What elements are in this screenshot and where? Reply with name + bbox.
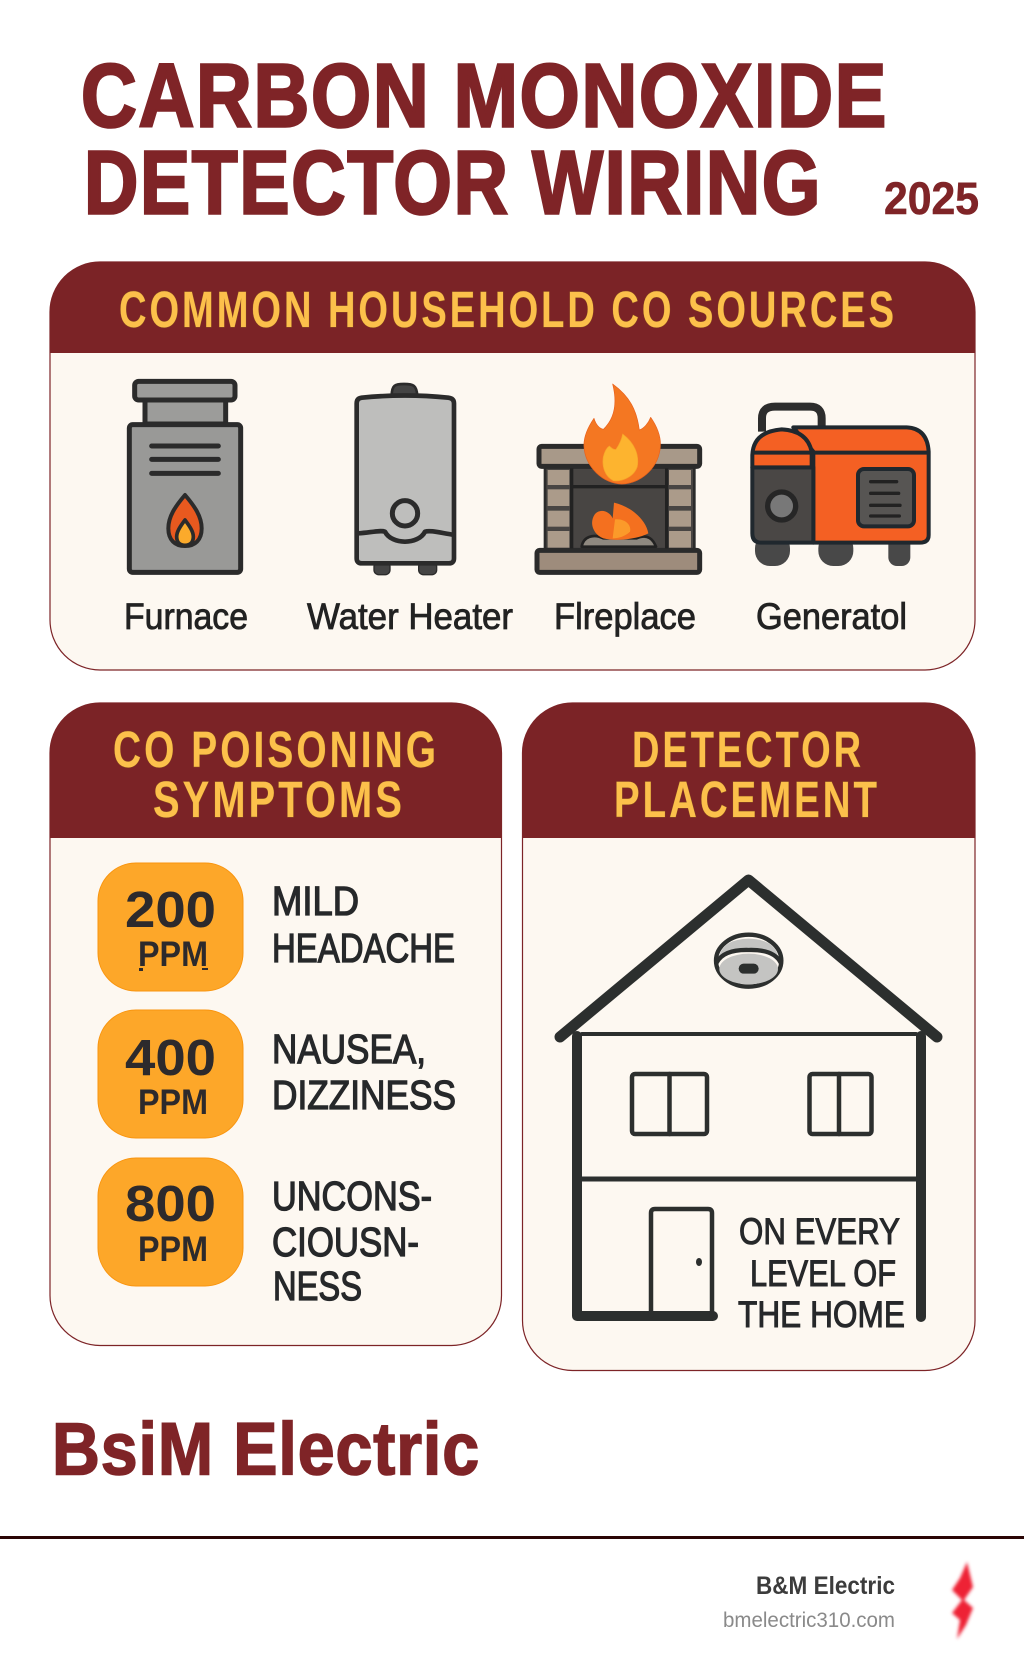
symptom: unconsciousness: CIOUSN- [272, 1219, 419, 1265]
icon: lightning bolt [952, 1562, 973, 1639]
footer text: bmelectric310.com [723, 1609, 895, 1632]
label: furnace: Furnace [124, 596, 248, 637]
footer text [723, 1572, 895, 1632]
heading: symptoms [113, 721, 439, 828]
icon: fireplace [537, 384, 700, 572]
label: fireplace: Flreplace [554, 596, 696, 637]
footer text: B&M Electric [756, 1572, 895, 1600]
icon: water heater [357, 384, 454, 575]
house diagram [560, 880, 937, 1317]
symptom: mild headache: MILD [272, 878, 359, 924]
window left [632, 1074, 707, 1134]
badge: 400 PPM: PPM [138, 1083, 208, 1122]
heading: placement [614, 721, 880, 828]
panel header: sources [50, 262, 975, 353]
heading: placement: DETECTOR [632, 721, 864, 778]
symptom: nausea, dizziness: DIZZINESS [272, 1072, 456, 1118]
house caption: LEVEL OF [750, 1253, 896, 1294]
heading: symptoms: SYMPTOMS [153, 771, 405, 828]
door [651, 1209, 712, 1316]
heading: placement: PLACEMENT [614, 771, 880, 828]
title: CARBON MONOXIDE [81, 46, 888, 146]
icon: smoke detector [716, 935, 781, 987]
year label: 2025 [884, 173, 979, 224]
title: DETECTOR WIRING [84, 134, 822, 234]
panel: common household CO sources [50, 262, 975, 670]
badge: 200 PPM [98, 863, 243, 991]
heading: symptoms: CO POISONING [113, 721, 439, 778]
panel header: placement [522, 703, 975, 838]
house caption: THE HOME [738, 1294, 905, 1335]
icon: generator [752, 407, 929, 566]
symptom: nausea, dizziness [272, 1026, 456, 1118]
symptom: mild headache: HEADACHE [272, 925, 455, 971]
title [81, 46, 888, 234]
symptom: unconsciousness: NESS [273, 1263, 362, 1309]
window right [810, 1074, 872, 1134]
house caption: ON EVERY [739, 1211, 900, 1252]
badge: 200 PPM: 200 [125, 881, 216, 938]
label: generator: Generatol [756, 596, 907, 637]
panel header: symptoms [50, 703, 502, 838]
badge: 800 PPM: PPM [138, 1230, 208, 1269]
symptom: mild headache [272, 878, 455, 971]
brand name: BsiM Electric [52, 1408, 480, 1490]
icon: furnace [129, 381, 241, 572]
symptom: unconsciousness: UNCONS- [272, 1173, 432, 1219]
symptom: unconsciousness [272, 1173, 432, 1309]
badge: 400 PPM: 400 [125, 1029, 216, 1086]
fireplace bricks [548, 470, 691, 548]
badge: 800 PPM: 800 [125, 1175, 216, 1232]
badge: 400 PPM [98, 1010, 243, 1138]
badge: 200 PPM: PPM [138, 935, 208, 974]
label: water heater: Water Heater [307, 596, 513, 637]
badge: 800 PPM [98, 1158, 243, 1286]
panel: CO poisoning symptoms [50, 703, 502, 1346]
house caption [738, 1211, 905, 1335]
panel: detector placement [522, 703, 975, 1370]
symptom: nausea, dizziness: NAUSEA, [272, 1026, 426, 1072]
